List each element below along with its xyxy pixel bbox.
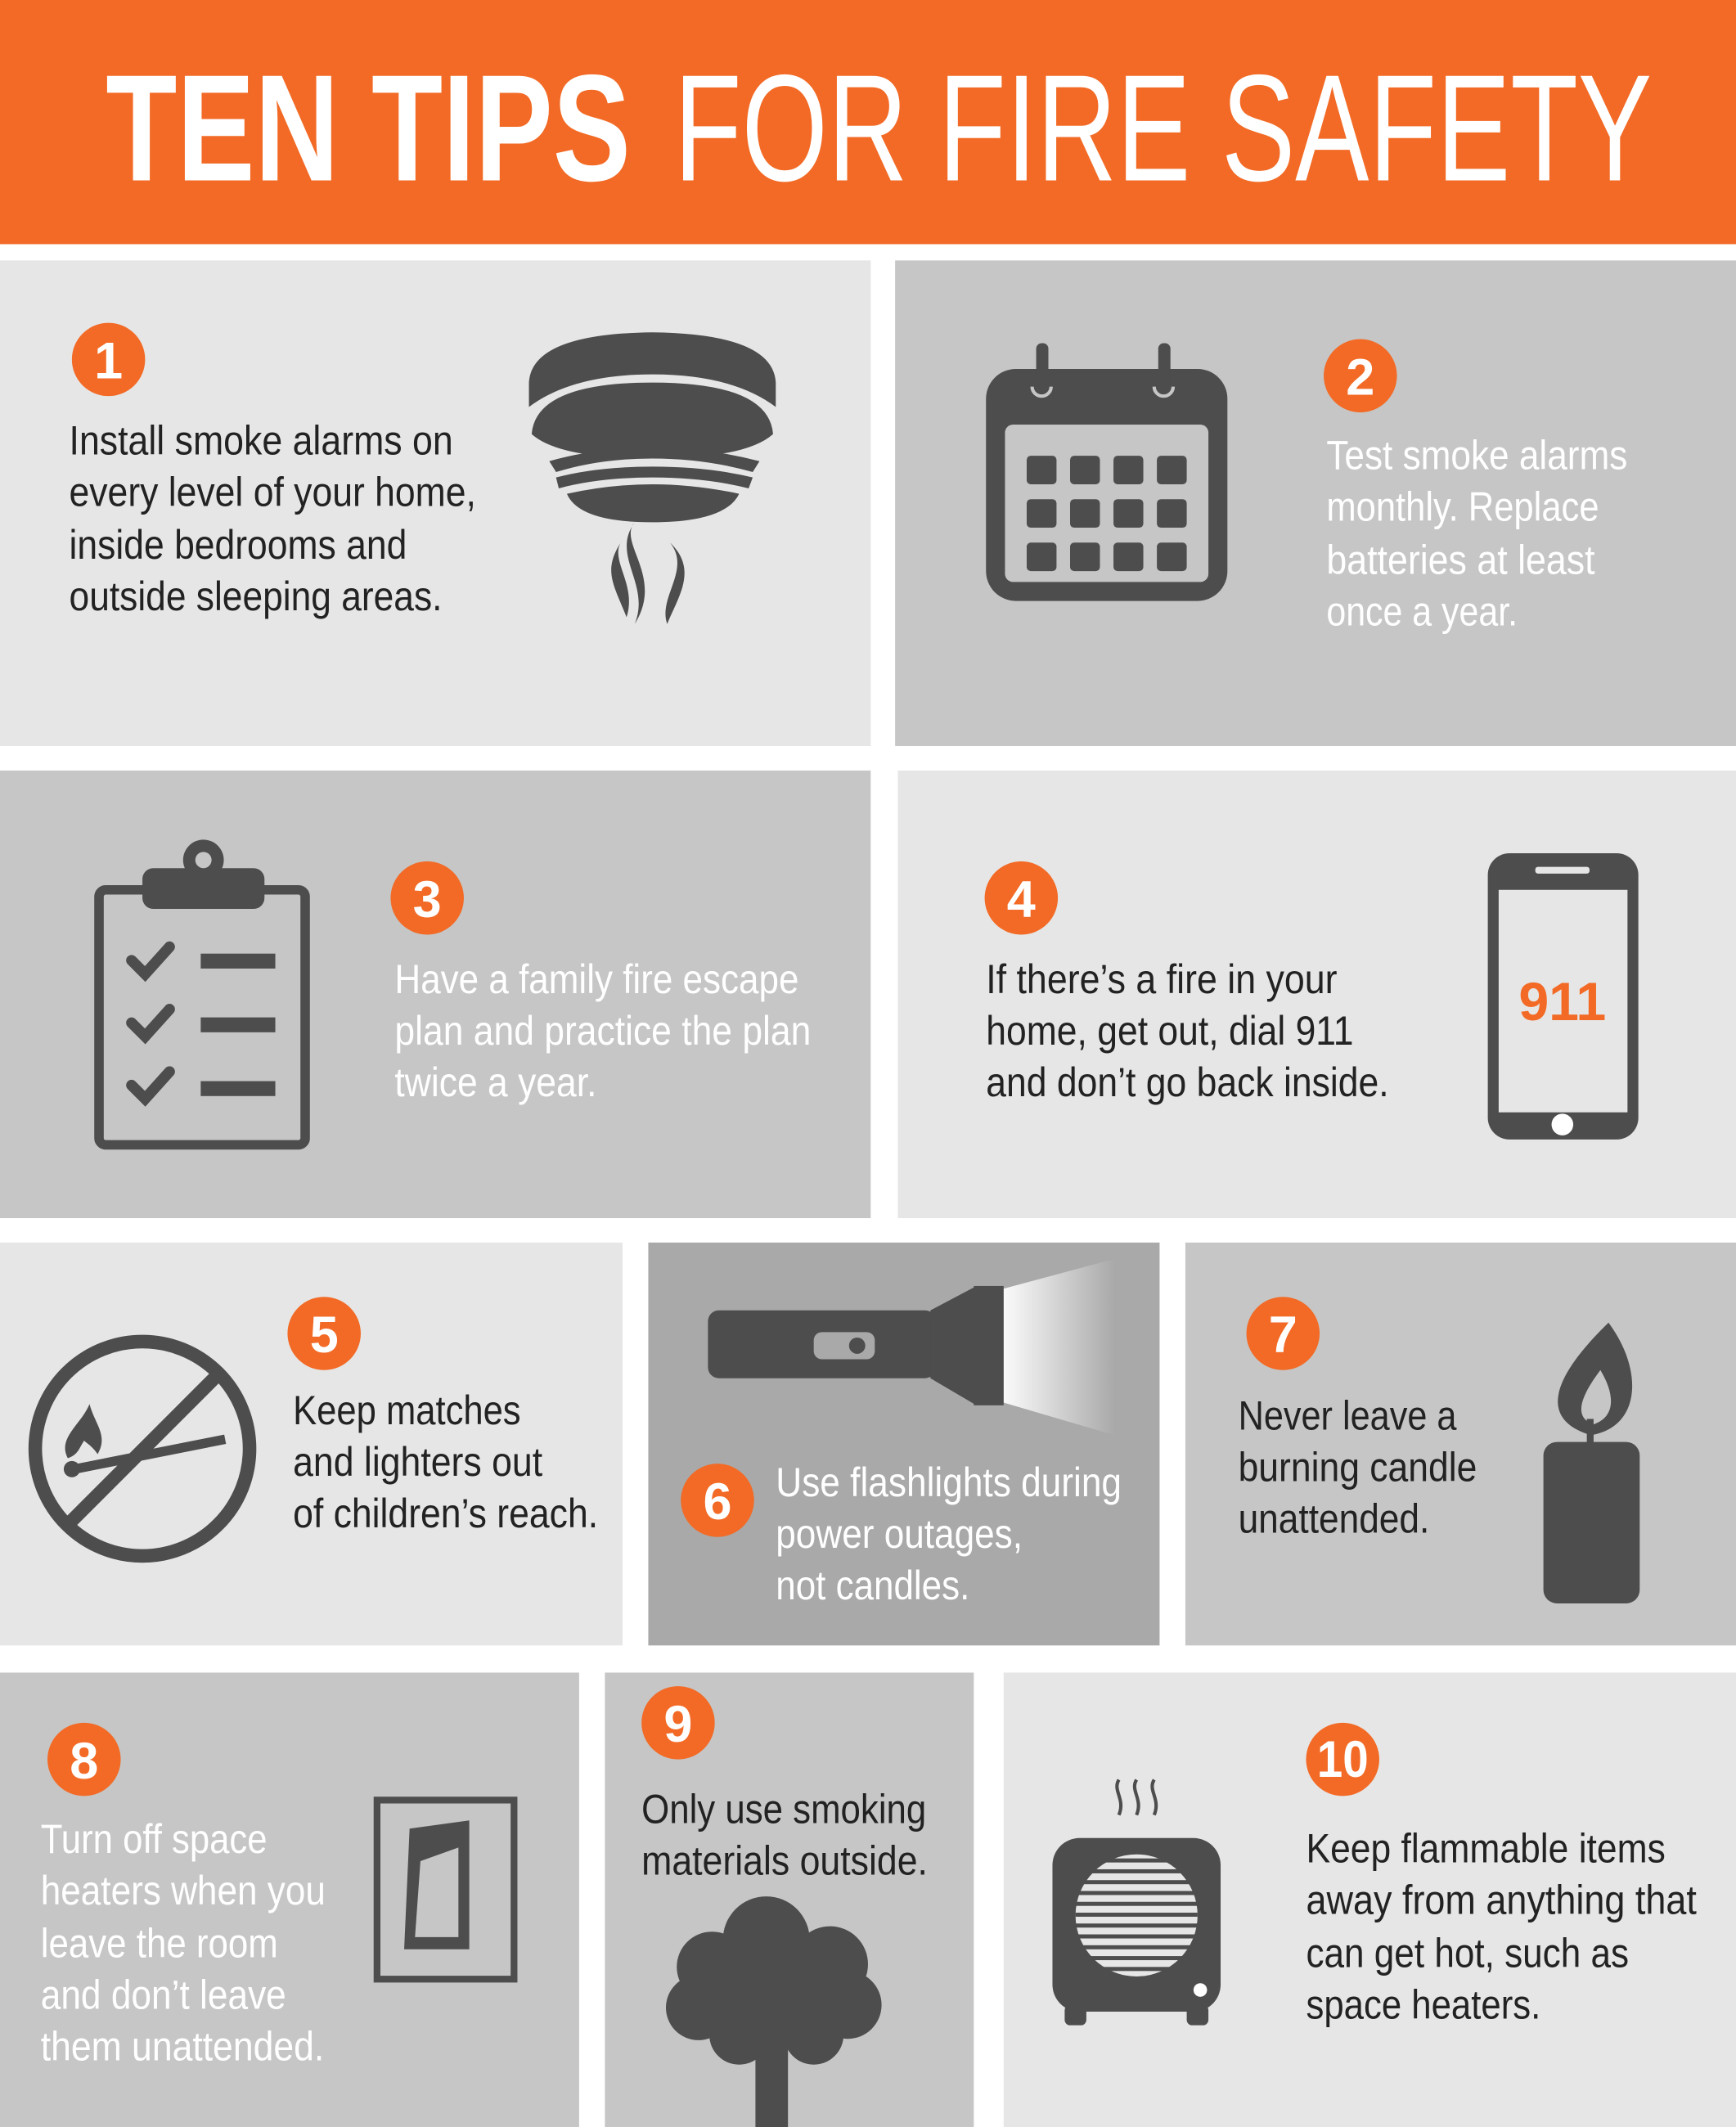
text 5: of children’s reach.: [293, 1491, 598, 1536]
number 9: [641, 1686, 715, 1760]
text 2: monthly. Replace: [1326, 484, 1599, 530]
icon: no matches: [35, 1342, 250, 1556]
text 3: plan and practice the plan: [394, 1008, 811, 1054]
number 10: 10: [1317, 1731, 1369, 1788]
text 2: once a year.: [1326, 588, 1518, 634]
icon: light switch: [377, 1800, 514, 1979]
icon: space heater: [1052, 1780, 1221, 2026]
text 7: burning candle: [1239, 1445, 1477, 1491]
icon: phone: [1488, 853, 1639, 1140]
panel 1: smoke alarms: [0, 260, 870, 746]
text 1: inside bedrooms and: [70, 522, 407, 568]
panel 2: test alarms: [895, 260, 1736, 746]
number 9: 9: [663, 1696, 692, 1753]
text 1: Install smoke alarms on: [70, 417, 453, 463]
text 1: outside sleeping areas.: [70, 573, 442, 619]
icon: clipboard: [99, 839, 305, 1144]
text 7: unattended.: [1239, 1496, 1429, 1542]
number 6: 6: [703, 1473, 732, 1531]
number 1: 1: [94, 333, 123, 390]
number 10: [1306, 1723, 1379, 1796]
text 6: power outages,: [776, 1511, 1023, 1557]
text 8: them unattended.: [41, 2024, 324, 2070]
text 5: Keep matches: [293, 1387, 521, 1433]
number 2: [1324, 340, 1397, 412]
number 3: [390, 861, 464, 934]
text 10: Keep flammable items: [1306, 1826, 1666, 1872]
text 2: batteries at least: [1326, 537, 1595, 582]
icon: candle: [1544, 1323, 1639, 1603]
text 8: and don’t leave: [41, 1972, 286, 2018]
number 7: [1247, 1297, 1320, 1370]
text 7: Never leave a: [1239, 1393, 1457, 1439]
number 4: [985, 861, 1058, 934]
header banner: [0, 0, 1736, 244]
number 8: 8: [70, 1733, 98, 1790]
text 1: every level of your home,: [70, 469, 476, 515]
number 6: [681, 1464, 754, 1537]
text 4: home, get out, dial 911: [986, 1008, 1353, 1054]
text 6: Use flashlights during: [776, 1459, 1122, 1505]
number 5: [287, 1297, 361, 1370]
number 8: [47, 1723, 121, 1796]
panel 10: flammable items: [1004, 1673, 1736, 2127]
text 3: twice a year.: [394, 1059, 596, 1105]
icon: tree: [666, 1896, 882, 2127]
text 10: space heaters.: [1306, 1981, 1540, 2027]
number 7: 7: [1269, 1306, 1298, 1364]
panel 3: escape plan: [0, 771, 870, 1218]
panel 6: flashlights: [648, 1243, 1159, 1645]
icon: phone: 911: [1518, 972, 1606, 1032]
number 5: 5: [310, 1306, 339, 1364]
panel 5: matches: [0, 1243, 623, 1645]
panel 9: smoking outside: [605, 1673, 974, 2127]
text 4: and don’t go back inside.: [986, 1059, 1389, 1105]
number 4: 4: [1007, 871, 1036, 929]
text 10: away from anything that: [1306, 1877, 1697, 1923]
text 8: heaters when you: [41, 1868, 326, 1913]
text 4: If there’s a fire in your: [986, 956, 1338, 1002]
text 5: and lighters out: [293, 1439, 542, 1485]
number 1: [72, 323, 145, 396]
text 2: Test smoke alarms: [1326, 433, 1627, 479]
number 3: 3: [413, 871, 442, 929]
text 9: Only use smoking: [641, 1787, 926, 1832]
title: TEN TIPS: [106, 44, 631, 214]
text 6: not candles.: [776, 1563, 969, 1608]
icon: calendar: [986, 344, 1227, 601]
icon: smoke alarm: [529, 332, 776, 624]
text 10: can get hot, such as: [1306, 1930, 1629, 1976]
number 2: 2: [1346, 349, 1374, 407]
panel 4: dial 911: [897, 771, 1736, 1218]
text 9: materials outside.: [641, 1838, 928, 1884]
text 3: Have a family fire escape: [394, 956, 798, 1002]
panel 8: space heaters off: [0, 1673, 579, 2127]
icon: flashlight: [708, 1259, 1115, 1435]
text 8: Turn off space: [41, 1816, 268, 1862]
panel 7: candle: [1185, 1243, 1736, 1645]
text 8: leave the room: [41, 1921, 278, 1967]
